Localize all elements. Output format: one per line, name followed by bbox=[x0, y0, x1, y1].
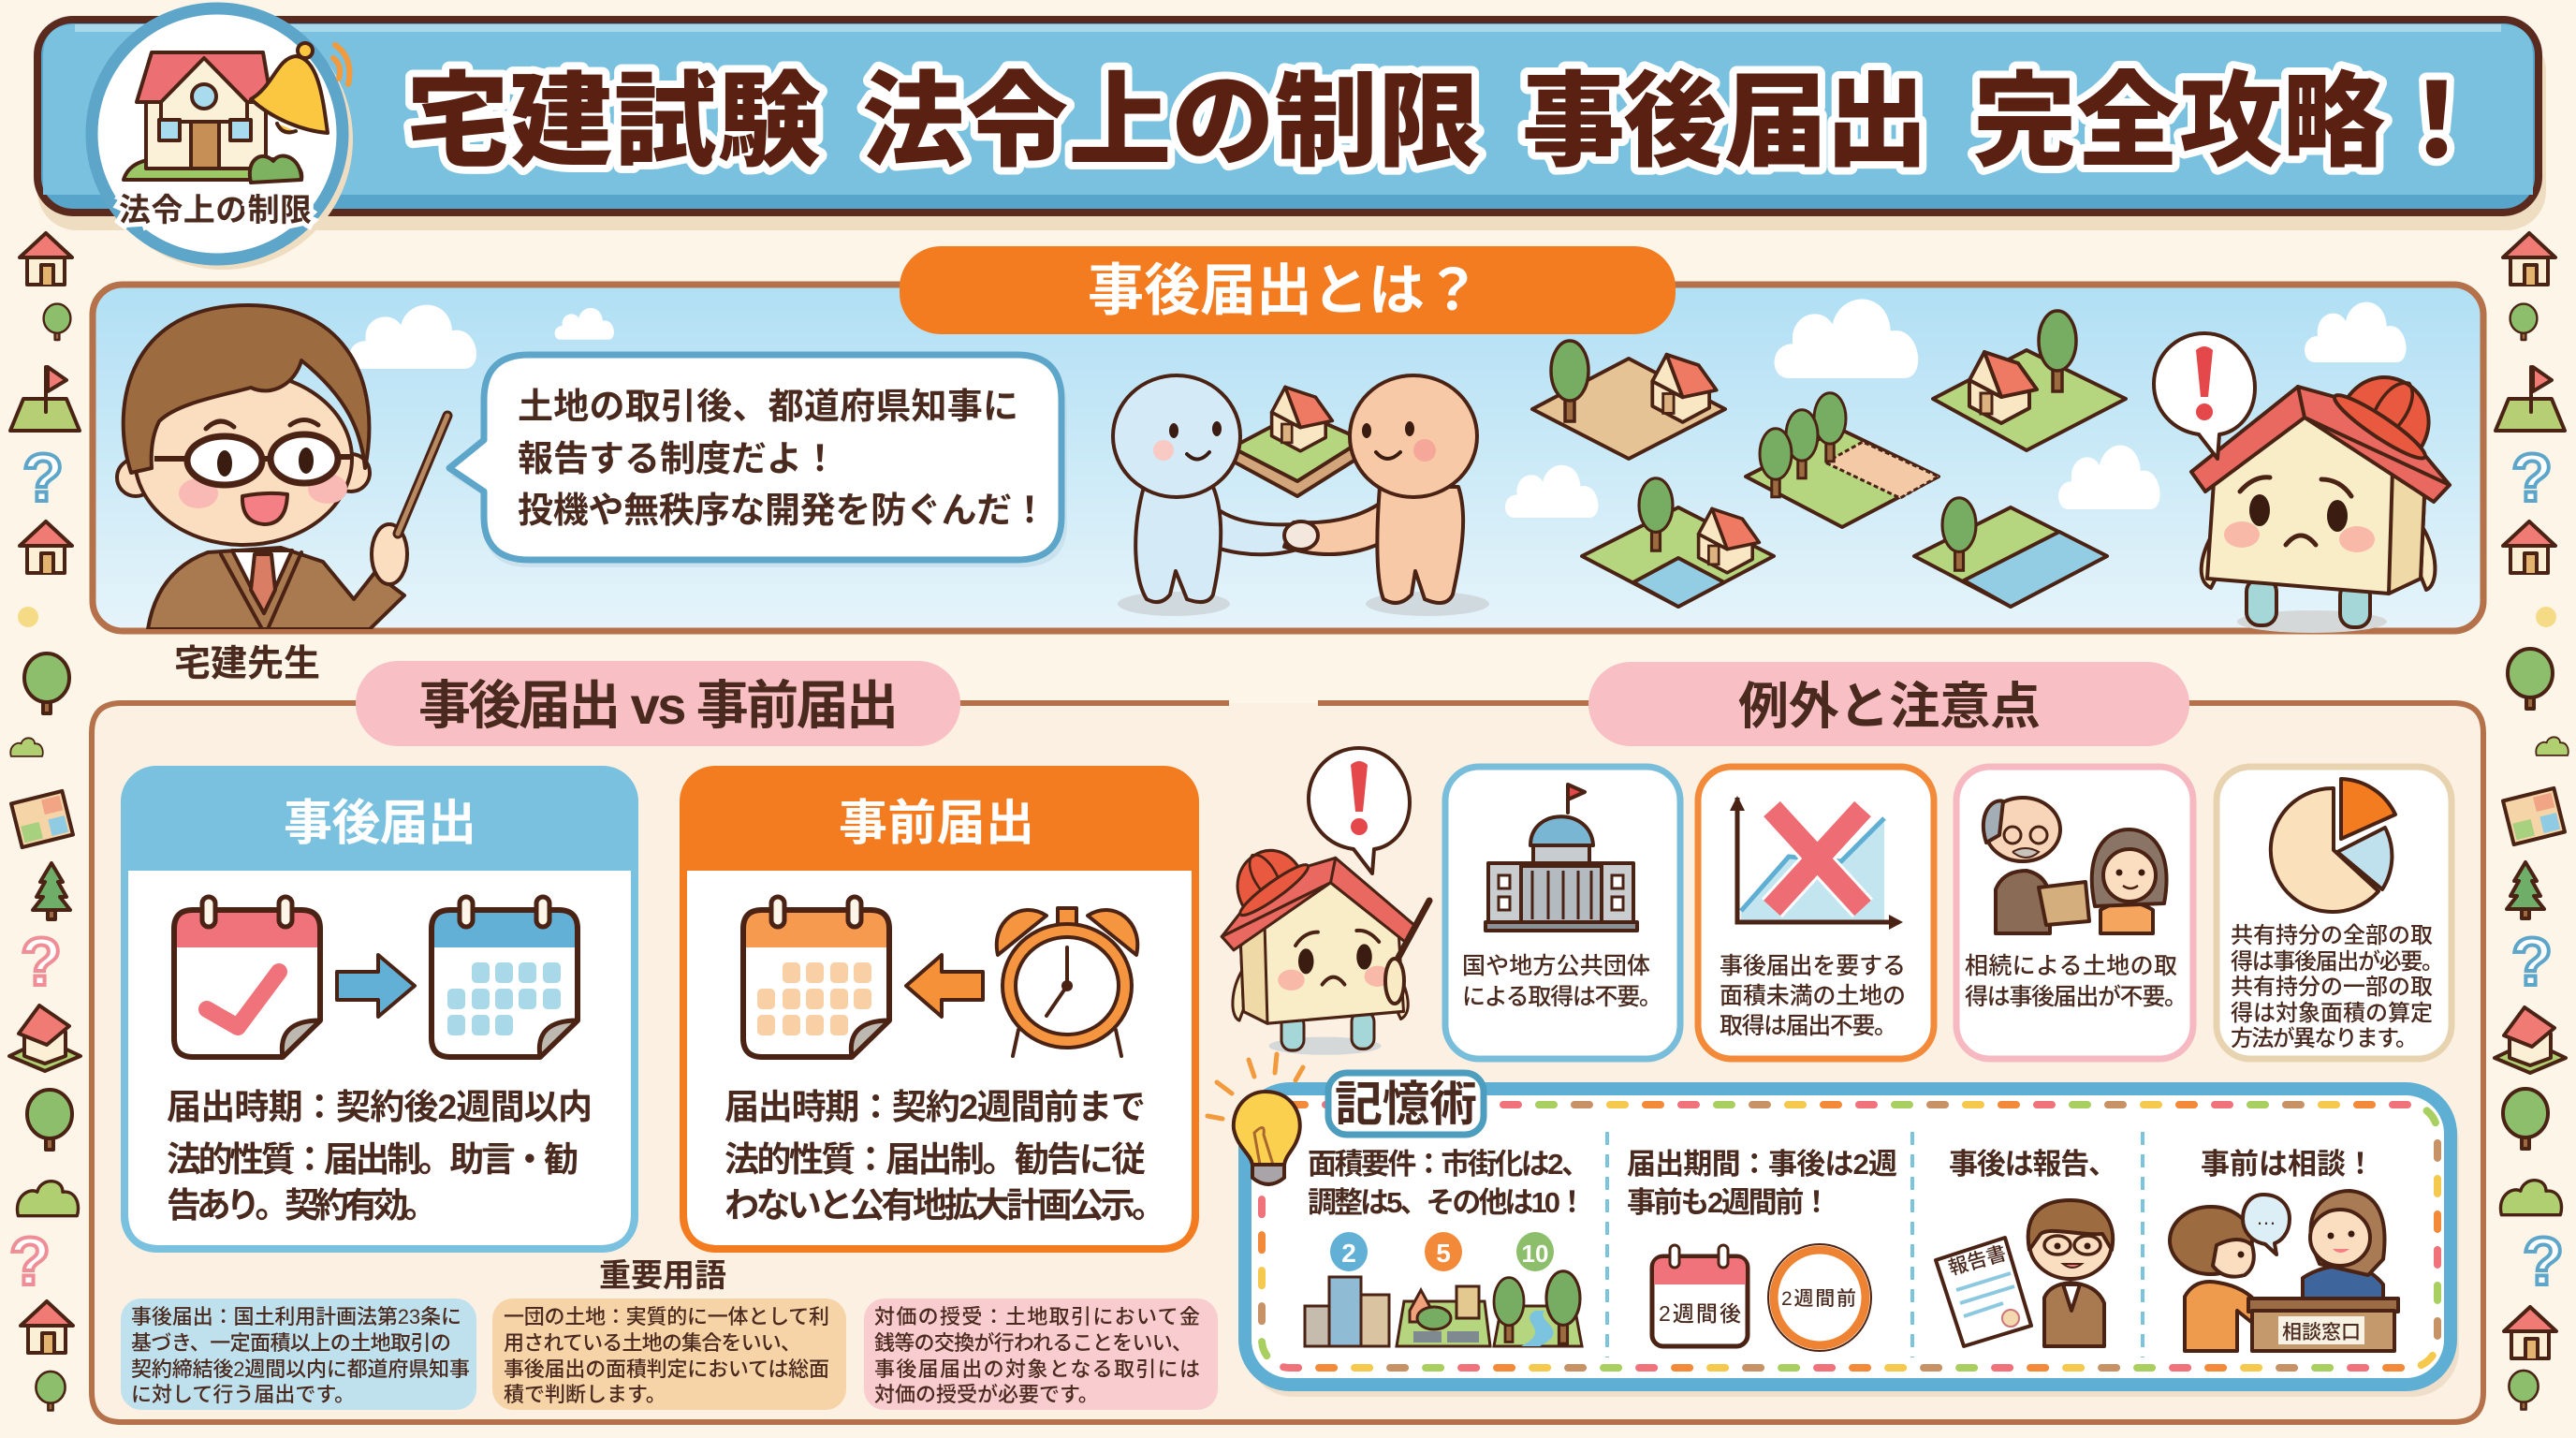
icon: small clock: 2週間前 bbox=[1781, 1288, 1856, 1310]
title text bbox=[406, 65, 2488, 180]
card text: 法的性質：届出制。助言・勧 bbox=[167, 1140, 578, 1179]
exception card: co-ownership: 得は事後届出が必要。 bbox=[2231, 949, 2444, 975]
heading: what is post-notification bbox=[900, 246, 1676, 334]
arrow: from clock bbox=[906, 955, 983, 1017]
icon: small calendar: 2週間後 bbox=[1659, 1301, 1741, 1326]
speech bubble: 報告する制度だよ！ bbox=[518, 440, 838, 479]
margin decorations right: ? bbox=[2523, 1225, 2564, 1299]
margin decorations right: ? bbox=[2511, 925, 2553, 1000]
title text: 事後届出 bbox=[1522, 65, 1928, 180]
icon: capitol bbox=[1486, 785, 1637, 931]
card: post-notification bbox=[121, 766, 638, 1253]
exclamation bubble bbox=[2154, 333, 2255, 459]
term box: post-notification: 契約締結後2週間以内に都道府県知事 bbox=[131, 1357, 470, 1381]
exception card: inheritance bbox=[1956, 767, 2193, 1059]
exclamation bubble bbox=[1309, 748, 1410, 873]
caption: teacher: 宅建先生 bbox=[174, 644, 320, 684]
exception card: co-ownership: 共有持分の全部の取 bbox=[2231, 923, 2433, 948]
illustration: handshake over land bbox=[1113, 375, 1489, 616]
mnemonic text: period: 事前も2週間前！ bbox=[1627, 1186, 1831, 1219]
margin decorations left: ? bbox=[9, 1225, 51, 1299]
icon: orange calendar bbox=[743, 897, 889, 1057]
icon: blue calendar bbox=[432, 897, 578, 1057]
icon: light bulb bbox=[1208, 1054, 1303, 1184]
panel: mnemonics bbox=[1245, 1089, 2459, 1397]
card text: 届出時期：契約後2週間以内 bbox=[167, 1088, 593, 1126]
heading: key terms: 重要用語 bbox=[599, 1258, 726, 1294]
icon: pie chart bbox=[2271, 779, 2395, 912]
mnemonic text: report: 事後は報告、 bbox=[1949, 1148, 2117, 1181]
character: worried house with pointer bbox=[1219, 831, 1429, 1055]
icon: area number badges: 10 bbox=[1522, 1240, 1548, 1268]
speech bubble bbox=[449, 355, 1067, 567]
term box: single plot bbox=[492, 1299, 846, 1410]
icon: area number badges: 5 bbox=[1436, 1239, 1451, 1268]
icon: consultation desk: … bbox=[2256, 1206, 2276, 1229]
card text: 法的性質：届出制。勧告に従 bbox=[724, 1140, 1146, 1179]
icon: small calendar bbox=[1652, 1245, 1748, 1346]
mnemonic text: area: 調整は5、その他は10！ bbox=[1308, 1186, 1587, 1219]
heading: mnemonics badge: 記憶術 bbox=[1335, 1078, 1477, 1131]
icon: elder and child bbox=[1983, 798, 2166, 933]
term box: consideration: 対価の授受：土地取引において金 bbox=[874, 1305, 1200, 1328]
icon: area number badges: 2 bbox=[1341, 1239, 1356, 1268]
exception card: co-ownership: 方法が異なります。 bbox=[2231, 1026, 2418, 1051]
margin decorations left: ? bbox=[21, 925, 62, 1000]
title text: 宅建試験 bbox=[406, 65, 821, 180]
icon: calendar with check bbox=[174, 897, 320, 1057]
exception card: below area threshold: 面積未満の土地の bbox=[1720, 983, 1906, 1009]
icon: alarm clock bbox=[997, 908, 1137, 1056]
heading: what is post-notification: 事後届出とは？ bbox=[1088, 259, 1481, 322]
exception card: government: による取得は不要。 bbox=[1462, 984, 1662, 1010]
exception card: co-ownership: 得は対象面積の算定 bbox=[2231, 1001, 2433, 1026]
icon: person with report bbox=[1936, 1200, 2113, 1346]
illustration: land parcels bbox=[1532, 311, 2126, 607]
term box: single plot: 一団の土地：実質的に一体として利 bbox=[504, 1305, 829, 1328]
heading: comparison: 事後届出 vs 事前届出 bbox=[418, 676, 899, 735]
exception card: inheritance: 相続による土地の取 bbox=[1965, 953, 2177, 979]
arrow: to next calendar bbox=[337, 955, 415, 1017]
icon: city town nature bbox=[1305, 1271, 1582, 1346]
card text: 届出時期：契約2週間前まで bbox=[724, 1088, 1146, 1126]
title text: 法令上の制限 bbox=[862, 65, 1481, 180]
panel: comparison and exceptions frame bbox=[92, 703, 2483, 1422]
speech bubble: 投機や無秩序な開発を防ぐんだ！ bbox=[518, 492, 1047, 531]
term box: consideration: 銭等の交換が行われることをいい、 bbox=[874, 1331, 1193, 1355]
icon: consultation desk bbox=[2170, 1191, 2398, 1351]
card text: わないと公有地拡大計画公示。 bbox=[724, 1186, 1166, 1225]
exception card: government bbox=[1445, 767, 1680, 1059]
card text bbox=[724, 1088, 1166, 1225]
card text bbox=[167, 1088, 593, 1225]
margin decorations right bbox=[2495, 233, 2569, 1410]
panel: what is post-notification bbox=[93, 285, 2483, 633]
exception card: below area threshold bbox=[1698, 767, 1934, 1059]
icon: crossed-out chart bbox=[1730, 796, 1903, 930]
heading: comparison bbox=[356, 661, 960, 746]
mnemonic text: area bbox=[1308, 1148, 1590, 1219]
icon: person with report: 報告書 bbox=[1946, 1242, 2009, 1280]
icon: small clock bbox=[1768, 1244, 1871, 1351]
term box: consideration bbox=[864, 1299, 1218, 1410]
exception card: co-ownership: 共有持分の一部の取 bbox=[2231, 975, 2433, 1000]
character: teacher bbox=[117, 305, 447, 629]
card: post-notification: 事後届出 bbox=[284, 797, 476, 851]
exception card: inheritance: 得は事後届出が不要。 bbox=[1965, 984, 2188, 1010]
heading: exceptions: 例外と注意点 bbox=[1738, 679, 2041, 735]
heading: exceptions bbox=[1588, 662, 2189, 746]
exception card: below area threshold: 事後届出を要する bbox=[1720, 953, 1906, 979]
exception card: below area threshold: 取得は届出不要。 bbox=[1720, 1013, 1897, 1039]
term box: single plot: 積で判断します。 bbox=[504, 1383, 666, 1406]
icon: area number badges bbox=[1330, 1232, 1554, 1271]
term box: post-notification bbox=[121, 1299, 476, 1410]
margin decorations right: ? bbox=[2511, 441, 2553, 516]
exception card: government: 国や地方公共団体 bbox=[1462, 953, 1650, 979]
clouds bbox=[349, 300, 2407, 518]
term box: post-notification: に対して行う届出です。 bbox=[131, 1383, 355, 1406]
badge label: 法令上の制限 bbox=[119, 193, 312, 228]
margin decorations left bbox=[9, 233, 80, 1410]
mnemonic text: period bbox=[1627, 1148, 1897, 1219]
mnemonic text: period: 届出期間：事後は2週 bbox=[1627, 1148, 1897, 1181]
speech bubble: 土地の取引後、都道府県知事に bbox=[518, 388, 1018, 427]
term box: single plot: 事後届出の面積判定においては総面 bbox=[504, 1357, 829, 1381]
term box: post-notification: 事後届出：国土利用計画法第23条に bbox=[131, 1305, 461, 1328]
mnemonic text: area: 面積要件：市街化は2、 bbox=[1308, 1148, 1590, 1181]
title text: 完全攻略！ bbox=[1973, 65, 2488, 180]
term box: post-notification: 基づき、一定面積以上の土地取引の bbox=[131, 1331, 451, 1355]
exception card: co-ownership bbox=[2217, 767, 2452, 1059]
character: worried house bbox=[2191, 353, 2454, 633]
mnemonic text: consult: 事前は相談！ bbox=[2201, 1148, 2375, 1181]
title banner bbox=[37, 20, 2546, 230]
card text: 告あり。契約有効。 bbox=[167, 1186, 438, 1225]
card: pre-notification bbox=[680, 766, 1199, 1253]
logo badge: house and bell bbox=[92, 8, 353, 270]
icon: consultation desk: 相談窓口 bbox=[2282, 1322, 2361, 1343]
term box: consideration: 事後届届出の対象となる取引には bbox=[874, 1357, 1200, 1381]
term box: consideration: 対価の授受が必要です。 bbox=[874, 1383, 1099, 1406]
card: pre-notification: 事前届出 bbox=[839, 797, 1034, 851]
margin decorations left: ? bbox=[22, 441, 64, 516]
term box: single plot: 用されている土地の集合をいい、 bbox=[504, 1331, 801, 1355]
